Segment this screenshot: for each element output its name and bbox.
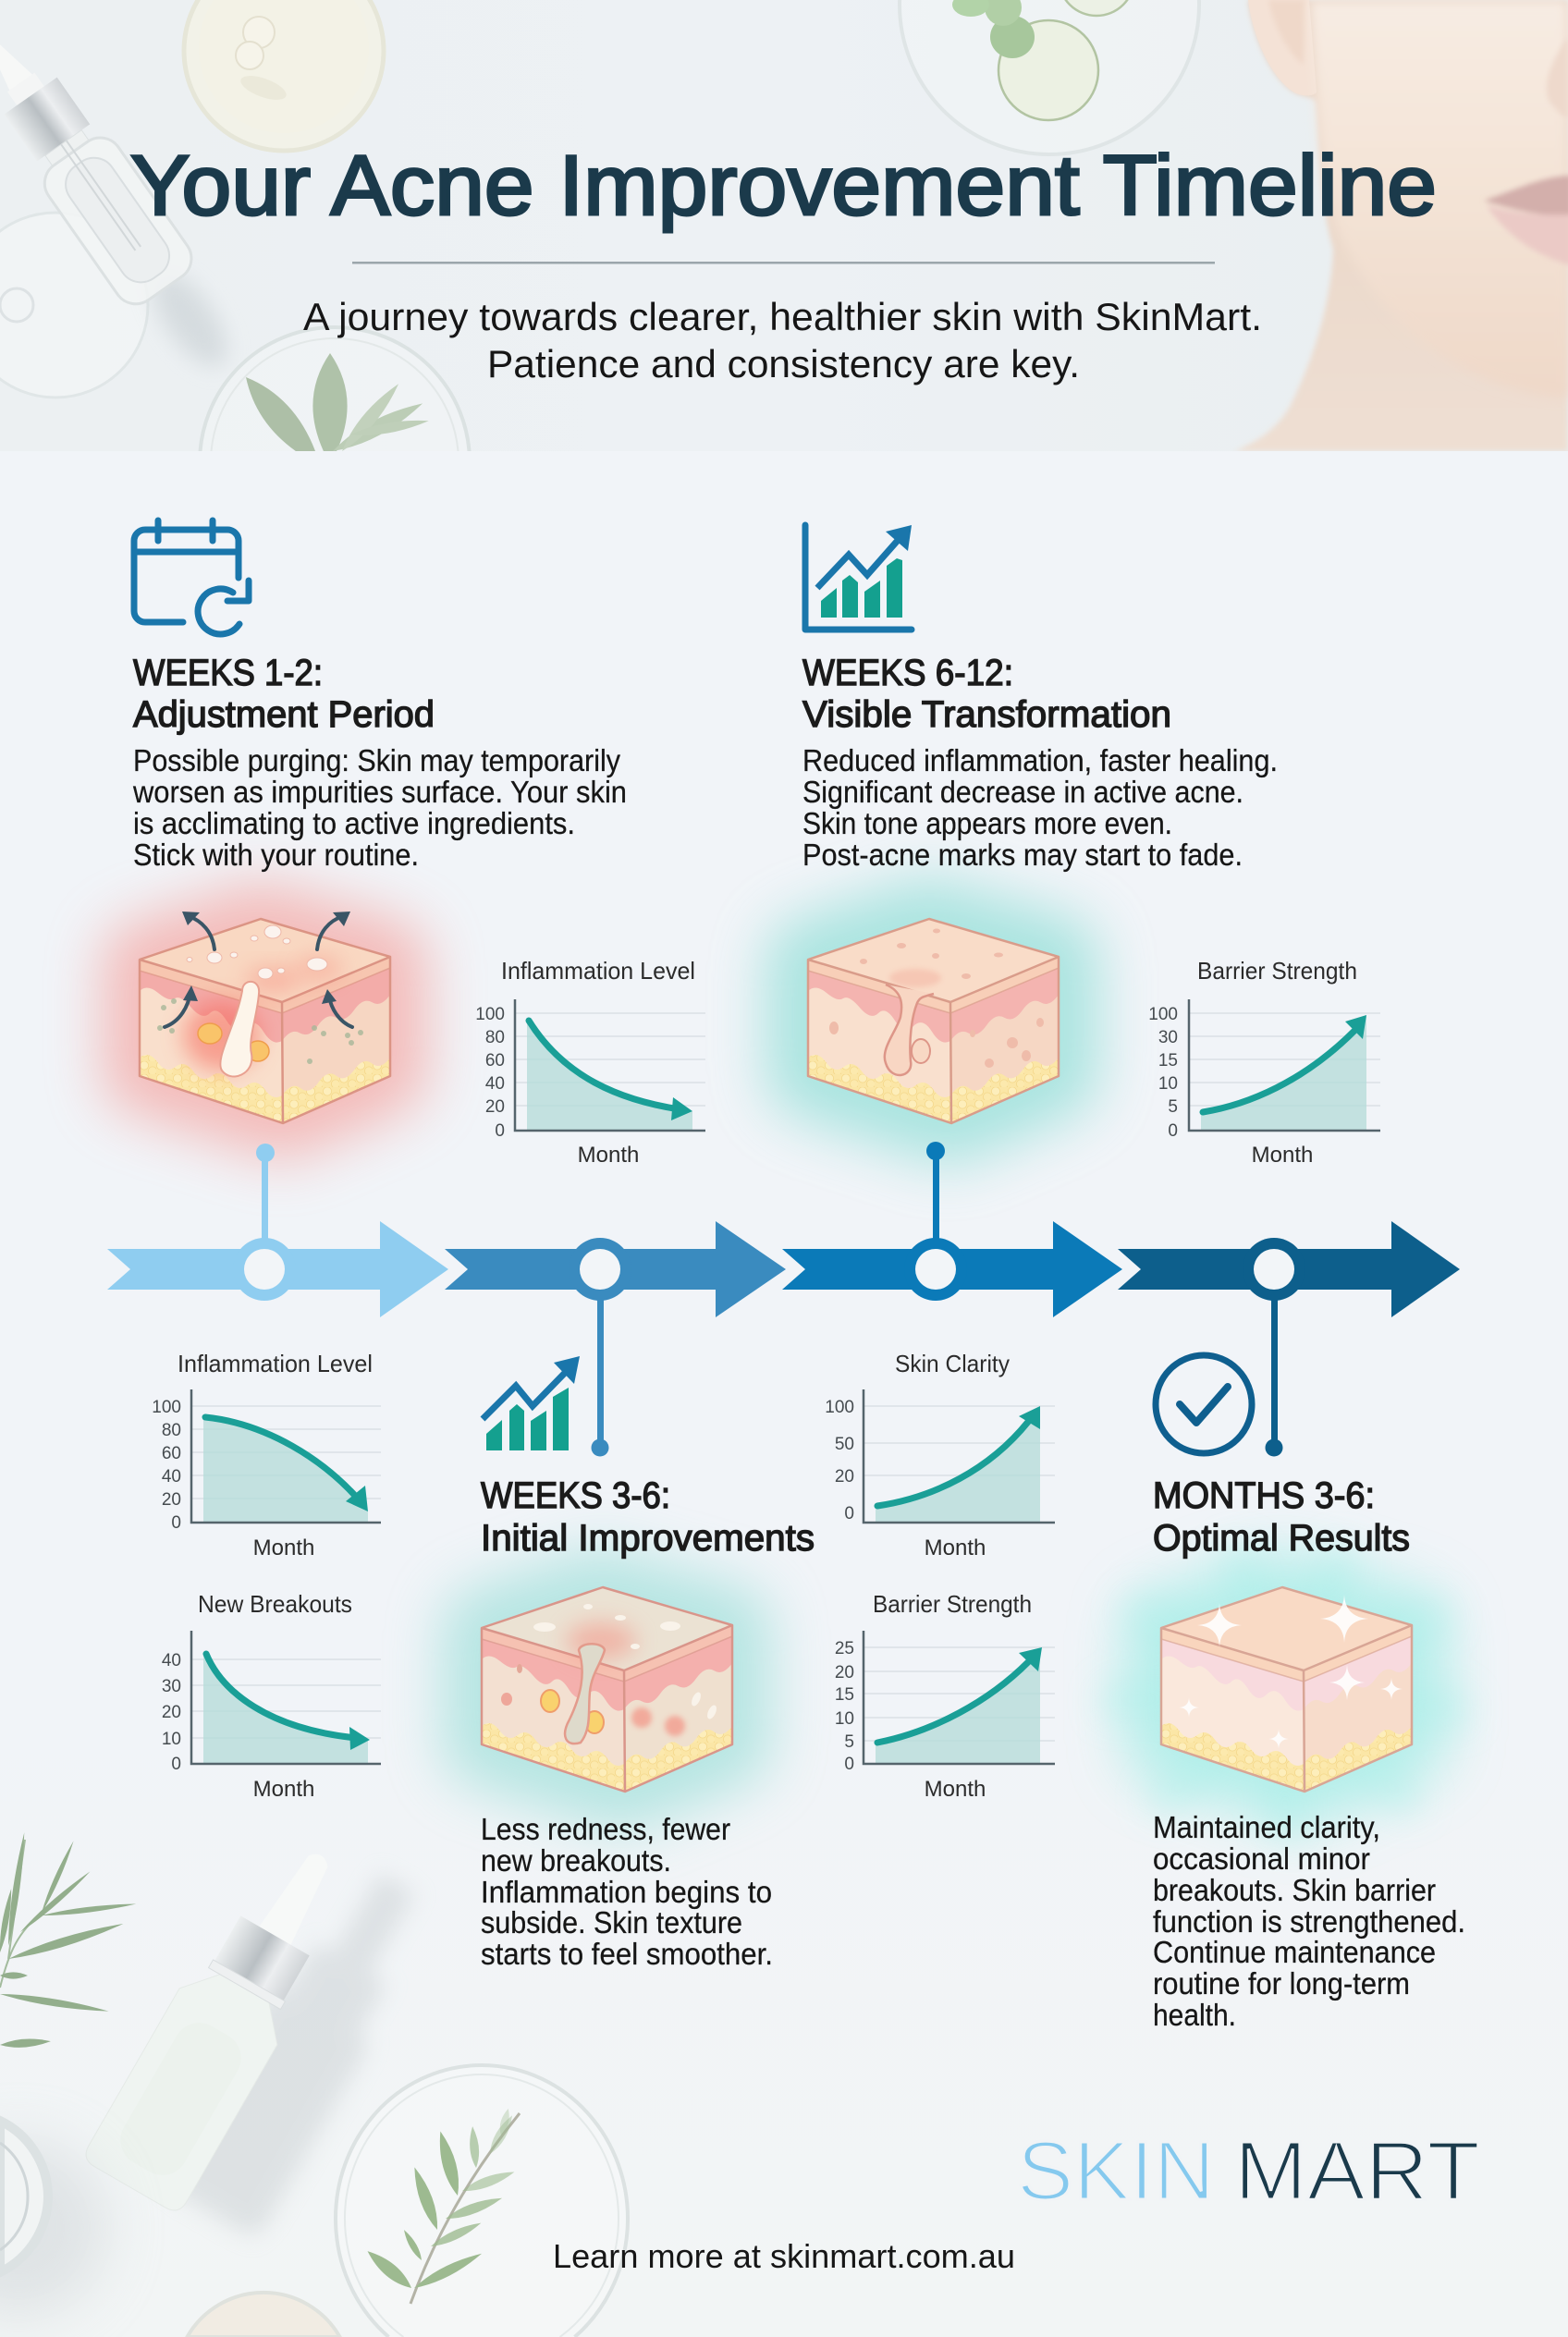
text: weeks 6-12 description: Significant decrease in active acne. <box>802 775 1243 809</box>
chart: inflammation level (weeks 1-2): Inflammation Level <box>501 957 695 985</box>
chart: barrier strength (weeks 6-12): 0 <box>1168 1121 1178 1141</box>
chart: new breakouts: 40 <box>162 1651 181 1670</box>
text: months 3-6 description: function is strengthened. <box>1153 1904 1465 1939</box>
heading: weeks 6-12: Visible Transformation <box>802 694 1171 735</box>
text: weeks 3-6 description: Less redness, fewer <box>481 1812 730 1846</box>
text: weeks 6-12 description: Reduced inflammation, faster healing. <box>802 743 1278 777</box>
chart: inflammation level (weeks 3-6): 20 <box>162 1490 181 1510</box>
chart: barrier strength (months 3-6): 5 <box>844 1732 854 1752</box>
chart: inflammation level (weeks 3-6): 40 <box>162 1467 181 1487</box>
text: weeks 3-6 description: new breakouts. <box>481 1843 671 1878</box>
chart: inflammation level (weeks 3-6): Month <box>253 1536 314 1560</box>
chart: barrier strength (weeks 6-12): 10 <box>1158 1074 1178 1094</box>
text: weeks 3-6 description: subside. Skin texture <box>481 1905 742 1939</box>
icon: growth chart small <box>483 1356 580 1450</box>
chart: inflammation level (weeks 3-6): 80 <box>162 1421 181 1440</box>
chart: inflammation level (weeks 1-2): 20 <box>485 1097 505 1117</box>
chart: inflammation level (weeks 1-2): 0 <box>495 1121 505 1141</box>
header photo band <box>0 0 1568 451</box>
panel: weeks 6-12 <box>802 525 1278 1123</box>
text: months 3-6 description: Maintained clarity, <box>1153 1810 1380 1844</box>
chart: new breakouts: 30 <box>162 1677 181 1696</box>
chart: barrier strength (months 3-6): 25 <box>835 1639 854 1658</box>
chart: skin clarity: 50 <box>835 1435 854 1454</box>
chart: barrier strength (months 3-6): 20 <box>835 1663 854 1682</box>
chart: inflammation level (weeks 1-2): 40 <box>485 1074 505 1094</box>
chart: barrier strength (weeks 6-12): Month <box>1252 1143 1313 1168</box>
chart: new breakouts <box>162 1590 381 1802</box>
heading: weeks 3-6: Initial Improvements <box>481 1518 815 1559</box>
chart: barrier strength (months 3-6) <box>835 1590 1055 1802</box>
chart: barrier strength (months 3-6): 15 <box>835 1685 854 1705</box>
text: months 3-6 description: occasional minor <box>1153 1841 1370 1876</box>
subtitle: A journey towards clearer, healthier skin with SkinMart. <box>303 295 1262 338</box>
illustration: irritated skin cube <box>140 912 390 1123</box>
photo: cucumber dish <box>900 0 1199 154</box>
heading: weeks 1-2 <box>133 653 435 735</box>
text: weeks 1-2 description: is acclimating to active ingredients. <box>133 806 575 840</box>
timeline arrow: stage 1 <box>107 1144 448 1317</box>
photo: rosemary sprig <box>0 1832 137 2049</box>
chart: skin clarity: Skin Clarity <box>895 1350 1010 1377</box>
illustration: healing skin cube <box>808 919 1059 1123</box>
chart: inflammation level (weeks 1-2): 60 <box>485 1051 505 1071</box>
text: weeks 1-2 description: worsen as impurities surface. Your skin <box>132 775 627 809</box>
photo: dish with herb sprig <box>336 2065 628 2337</box>
chart: barrier strength (months 3-6): 0 <box>844 1755 854 1774</box>
text: weeks 6-12 description: Post-acne marks may start to fade. <box>802 838 1243 872</box>
chart: inflammation level (weeks 1-2): 80 <box>485 1028 505 1047</box>
chart: inflammation level (weeks 3-6): 100 <box>152 1398 181 1417</box>
lips <box>1484 176 1568 265</box>
chart: skin clarity <box>825 1350 1055 1560</box>
timeline arrow: stage 4 <box>1118 1221 1460 1457</box>
photo: cream petri dish <box>184 0 384 151</box>
text: months 3-6 description: Continue maintenance <box>1153 1935 1436 1969</box>
timeline arrow: stage 3 <box>782 1142 1122 1317</box>
heading: weeks 1-2: Adjustment Period <box>133 694 435 735</box>
chart: inflammation level (weeks 3-6) <box>152 1350 381 1560</box>
text: weeks 1-2 description: Possible purging: Skin may temporarily <box>133 743 620 777</box>
timeline arrow: stage 2 <box>445 1221 786 1457</box>
chart: new breakouts: New Breakouts <box>198 1590 352 1618</box>
heading: months 3-6: MONTHS 3-6: <box>1153 1475 1375 1516</box>
panel: weeks 3-6 <box>481 1356 815 1971</box>
logo: skinmart: SKIN <box>1017 2125 1215 2218</box>
chart: skin clarity: 20 <box>835 1467 854 1487</box>
heading: weeks 1-2: WEEKS 1-2: <box>133 653 323 693</box>
text: months 3-6 description: breakouts. Skin barrier <box>1153 1873 1436 1907</box>
chart: barrier strength (weeks 6-12): 5 <box>1168 1097 1178 1117</box>
subtitle <box>303 295 1262 385</box>
photo: dish with leaves <box>198 325 472 451</box>
text: months 3-6 description: routine for long-term <box>1153 1966 1410 2001</box>
text: weeks 3-6 description: Inflammation begins to <box>481 1875 772 1909</box>
chart: new breakouts: Month <box>253 1777 314 1802</box>
panel: months 3-6 <box>1105 1355 1465 2032</box>
chart: skin clarity: 0 <box>844 1504 854 1523</box>
chart: barrier strength (weeks 6-12): 100 <box>1148 1005 1178 1024</box>
chart: barrier strength (months 3-6): Month <box>925 1777 986 1802</box>
photo: glass serum bottle <box>0 44 229 367</box>
chart: skin clarity: Month <box>925 1536 986 1560</box>
text: weeks 1-2 description: Stick with your routine. <box>133 838 419 872</box>
text: weeks 1-2 description <box>132 743 627 872</box>
subtitle: Patience and consistency are key. <box>487 342 1080 385</box>
heading: weeks 6-12 <box>802 653 1171 735</box>
chart: inflammation level (weeks 3-6): 60 <box>162 1444 181 1463</box>
heading: weeks 3-6: WEEKS 3-6: <box>481 1475 670 1516</box>
chart: inflammation level (weeks 1-2): 100 <box>475 1005 505 1024</box>
chart: new breakouts: 10 <box>162 1730 181 1749</box>
title divider <box>352 262 1215 264</box>
chart: barrier strength (weeks 6-12) <box>1148 957 1380 1168</box>
text: months 3-6 description: health. <box>1153 1998 1236 2032</box>
photo: frosted dropper bottle <box>81 1828 447 2240</box>
photo: face <box>1234 0 1568 451</box>
icon: calendar refresh <box>134 520 249 634</box>
title: Your Acne Improvement Timeline <box>130 139 1437 233</box>
chart: inflammation level (weeks 1-2) <box>475 957 705 1168</box>
illustration: clear glowing skin cube <box>1105 1546 1465 1835</box>
arrows: impurities rising <box>165 916 352 1027</box>
chart: inflammation level (weeks 3-6): 0 <box>171 1513 181 1533</box>
photo: clear round dish <box>0 213 148 398</box>
illustration: improving skin cube <box>482 1587 732 1792</box>
heading: weeks 6-12: WEEKS 6-12: <box>802 653 1013 693</box>
logo: skinmart <box>1017 2125 1480 2218</box>
chart: inflammation level (weeks 3-6): Inflammation Level <box>178 1350 373 1377</box>
heading: weeks 3-6 <box>481 1475 815 1559</box>
chart: new breakouts: 0 <box>171 1755 181 1774</box>
icon: growth chart <box>805 525 912 630</box>
chart: barrier strength (weeks 6-12): 30 <box>1158 1028 1178 1047</box>
panel: weeks 1-2 <box>132 520 627 1123</box>
chart: skin clarity: 100 <box>825 1398 854 1417</box>
text: weeks 6-12 description: Skin tone appears more even. <box>802 806 1172 840</box>
text: weeks 6-12 description <box>802 743 1278 872</box>
text: months 3-6 description <box>1153 1810 1465 2032</box>
text: weeks 3-6 description: starts to feel smoother. <box>481 1937 773 1971</box>
heading: months 3-6 <box>1153 1475 1410 1559</box>
heading: months 3-6: Optimal Results <box>1153 1518 1410 1559</box>
photo: powder dish <box>187 2293 340 2337</box>
icon: check circle <box>1156 1355 1252 1453</box>
chart: barrier strength (weeks 6-12): Barrier Strength <box>1197 957 1357 985</box>
text: weeks 3-6 description <box>481 1812 773 1971</box>
chart: barrier strength (weeks 6-12): 15 <box>1158 1051 1178 1071</box>
chart: barrier strength (months 3-6): Barrier Strength <box>873 1590 1032 1618</box>
chart: inflammation level (weeks 1-2): Month <box>578 1143 639 1168</box>
footer link: Learn more at skinmart.com.au <box>553 2237 1015 2275</box>
chart: barrier strength (months 3-6): 10 <box>835 1709 854 1729</box>
photo: left jar <box>0 2121 106 2316</box>
logo: skinmart: MART <box>1234 2125 1480 2218</box>
chart: new breakouts: 20 <box>162 1703 181 1722</box>
